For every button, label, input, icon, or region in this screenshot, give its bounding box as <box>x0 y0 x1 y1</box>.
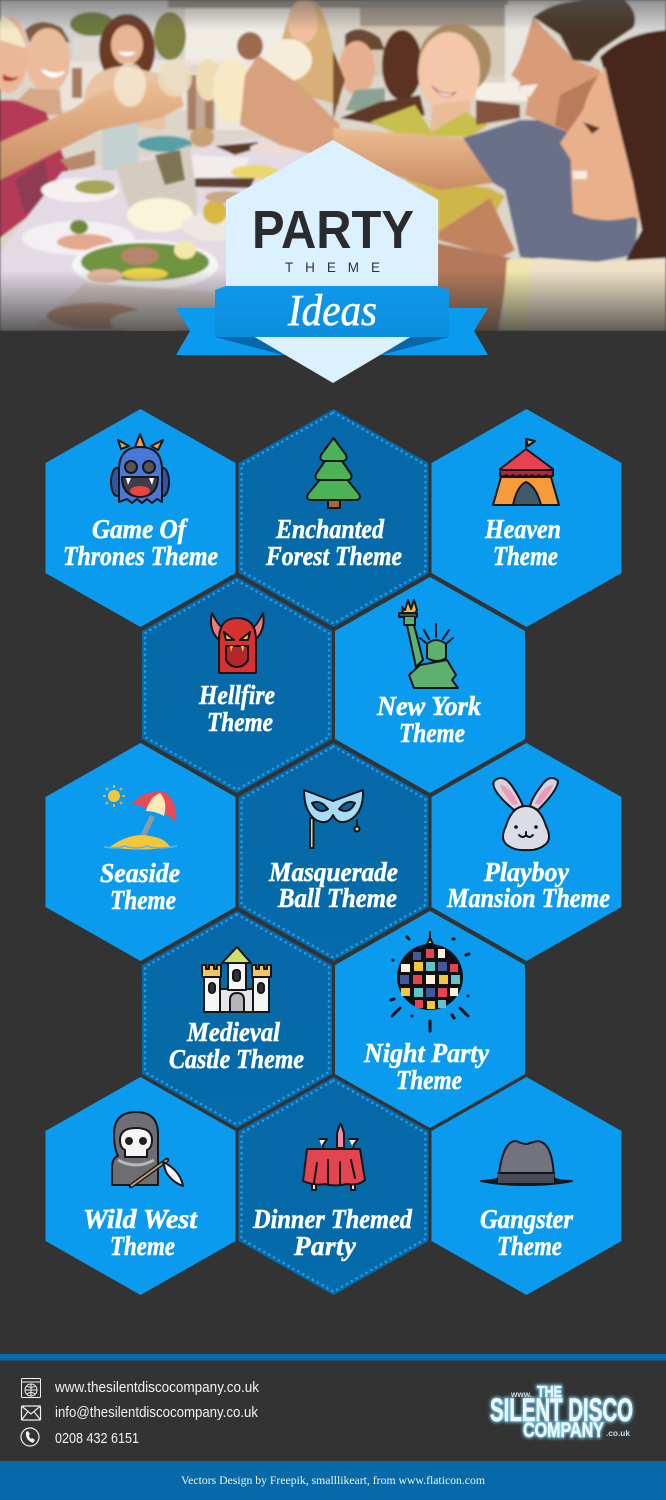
subheading Ideas: Ideas <box>287 286 377 335</box>
panel: Hellfire <box>142 577 332 793</box>
label: Castle Theme <box>169 1044 304 1074</box>
logo: The Silent Disco Company: THE <box>537 1384 562 1401</box>
label <box>63 514 218 571</box>
icon: circus tent <box>493 439 559 505</box>
far-left guests <box>98 13 157 73</box>
icon: monster <box>111 434 169 503</box>
ribbon fold left <box>215 337 330 355</box>
website: www.thesilentdiscocompany.co.uk <box>54 1379 259 1396</box>
label <box>268 857 398 913</box>
label: Theme <box>110 885 176 915</box>
label <box>198 680 275 737</box>
label: Playboy <box>483 857 570 887</box>
panel: Gangster <box>432 1077 622 1295</box>
panel: Enchanted Forest <box>238 409 428 627</box>
glass jug <box>115 145 197 225</box>
dark-skinned woman <box>382 30 422 100</box>
label <box>484 514 561 571</box>
icon: fedora hat <box>481 1141 572 1185</box>
panel: Game Of Thrones <box>46 409 236 627</box>
title badge <box>176 140 488 383</box>
icon: phone <box>21 1428 39 1446</box>
label: Seaside <box>100 858 180 888</box>
icon: dinner table with wine <box>303 1124 365 1190</box>
panel: Medieval Castle <box>142 911 332 1128</box>
icon: castle <box>202 947 271 1012</box>
plates <box>41 178 119 202</box>
contact details <box>21 1378 259 1447</box>
foreground woman <box>600 30 666 262</box>
badge hexagon lower point <box>253 336 412 383</box>
left hand on forearm <box>0 82 184 180</box>
logo: The Silent Disco Company: COMPANY <box>523 1419 604 1442</box>
ribbon tail left <box>176 308 290 355</box>
icon: envelope <box>22 1406 40 1420</box>
heading PARTY: PARTY <box>252 200 414 260</box>
email: info@thesilentdiscocompany.co.uk <box>55 1404 258 1421</box>
label: Thrones Theme <box>63 541 218 571</box>
credit text: Vectors Design by Freepik, smalllikeart, from www.flaticon.com <box>181 1473 486 1487</box>
header photo: friends toasting at a dinner table <box>0 0 666 334</box>
panel: Dinner Themed Party <box>238 1077 428 1295</box>
icon: statue of liberty <box>399 600 458 688</box>
logo: The Silent Disco Company: COMPANY <box>523 1419 604 1442</box>
footer divider band <box>0 1354 666 1360</box>
label <box>169 1017 304 1074</box>
label: Hellfire <box>198 680 275 710</box>
label <box>265 514 402 571</box>
label: New York <box>376 691 481 721</box>
icon: masquerade mask <box>304 790 363 848</box>
panel: Masquerade Ball <box>238 743 428 961</box>
label: Theme <box>497 1231 562 1261</box>
label: Medieval <box>186 1017 280 1047</box>
label <box>480 1204 573 1261</box>
table <box>0 136 310 326</box>
logo: The Silent Disco Company: .co.uk <box>606 1429 631 1438</box>
icon: red devil <box>211 613 264 673</box>
label <box>376 691 481 748</box>
foreground man <box>463 120 640 266</box>
label: Masquerade <box>268 857 398 887</box>
icon: grim reaper <box>112 1112 183 1186</box>
small background man <box>345 29 385 50</box>
cream sweater <box>530 256 666 316</box>
label: Heaven <box>484 514 561 544</box>
label: Forest Theme <box>265 541 402 571</box>
panel: Heaven <box>432 409 622 627</box>
label: Ball Theme <box>277 883 397 913</box>
label: Night Party <box>363 1038 490 1068</box>
panel: Seaside <box>46 743 236 961</box>
subheading THEME: THEME <box>285 260 380 275</box>
label: Wild West <box>83 1204 199 1234</box>
label: Party <box>293 1231 357 1261</box>
far blonde guest <box>282 0 340 105</box>
label: Theme <box>493 541 558 571</box>
label: Theme <box>207 707 273 737</box>
icon: beach umbrella and sun <box>103 785 177 850</box>
label <box>363 1038 490 1095</box>
icon: website globe <box>22 1378 40 1398</box>
panel: Night Party <box>335 911 525 1128</box>
label: Theme <box>110 1231 175 1261</box>
label: Theme <box>399 718 465 748</box>
icon: pine tree <box>307 438 360 508</box>
label: Dinner Themed <box>252 1204 412 1234</box>
label <box>252 1204 412 1261</box>
icon: rabbit <box>493 778 558 850</box>
phone number: 0208 432 6151 <box>55 1430 139 1447</box>
logo: The Silent Disco Company: THE <box>537 1384 562 1401</box>
right hand <box>240 55 340 160</box>
logo: The Silent Disco Company <box>490 1384 633 1442</box>
icon: disco ball <box>391 932 469 1031</box>
label: Game Of <box>92 514 189 544</box>
label <box>83 1204 199 1261</box>
ribbon tail right <box>376 308 488 355</box>
label <box>446 857 610 913</box>
panel: Playboy Mansion <box>432 743 622 961</box>
ribbon band <box>215 286 449 337</box>
bowl and corn <box>182 214 226 241</box>
label: Enchanted <box>275 514 384 544</box>
panel: Wild West <box>46 1077 236 1295</box>
label: Gangster <box>480 1204 573 1234</box>
panel: New York <box>335 577 525 793</box>
logo: The Silent Disco Company: www. <box>510 1390 532 1399</box>
bottom platter <box>38 283 215 327</box>
label: Mansion Theme <box>446 883 610 913</box>
wine glasses <box>114 63 146 107</box>
badge hexagon upper <box>226 140 438 288</box>
label: Theme <box>396 1065 462 1095</box>
label <box>100 858 180 915</box>
footer credit bar <box>0 1461 666 1500</box>
smiling woman in yellow <box>419 24 491 96</box>
outstretched arm <box>333 128 493 190</box>
bread, bowl, basket <box>190 127 214 147</box>
ribbon fold right <box>334 337 449 355</box>
